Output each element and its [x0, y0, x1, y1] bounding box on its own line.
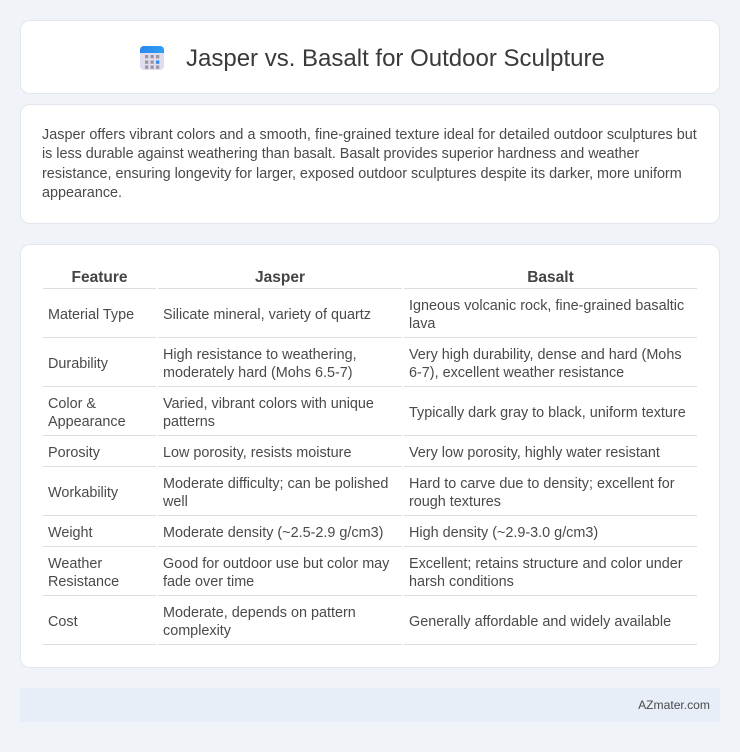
comparison table: Moderate density (~2.5-2.9 g/cm3)	[163, 525, 383, 541]
row: cost	[43, 605, 697, 645]
comparison table: Material Type	[48, 307, 134, 323]
comparison table: Hard to carve due to density; excellent for	[409, 476, 675, 492]
comparison table: Moderate difficulty; can be polished	[163, 476, 388, 492]
row: weight	[43, 525, 697, 547]
comparison table: Cost	[48, 614, 78, 630]
summary text: resistance, ensuring longevity for larger, exposed outdoor sculptures despite its darker, more uniform	[42, 166, 682, 182]
comparison table: Very low porosity, highly water resistant	[409, 445, 660, 461]
summary text: is less durable against weathering than basalt. Basalt provides superior hardness and weather	[42, 146, 639, 162]
footer credit: AZmater.com	[638, 698, 710, 712]
comparison table: Porosity	[48, 445, 100, 461]
row: workability	[43, 476, 697, 516]
summary text: appearance.	[42, 185, 122, 201]
comparison table: Moderate, depends on pattern	[163, 605, 356, 621]
comparison table: Low porosity, resists moisture	[163, 445, 351, 461]
comparison table: harsh conditions	[409, 574, 514, 590]
comparison table: Weight	[48, 525, 93, 541]
comparison table: Workability	[48, 485, 118, 501]
comparison table: Feature	[72, 269, 128, 286]
comparison table: 6-7), excellent weather resistance	[409, 365, 624, 381]
comparison table: Resistance	[48, 574, 119, 590]
comparison table: Basalt	[527, 269, 574, 286]
title: Jasper vs. Basalt for Outdoor Sculpture	[186, 45, 605, 72]
summary text: Jasper offers vibrant colors and a smooth, fine-grained texture ideal for detailed outdoor sculptures but	[42, 127, 697, 143]
comparison table: High density (~2.9-3.0 g/cm3)	[409, 525, 598, 541]
comparison table: High resistance to weathering,	[163, 347, 357, 363]
comparison table: Generally affordable and widely available	[409, 614, 671, 630]
row: color and appearance	[43, 396, 697, 436]
comparison table: fade over time	[163, 574, 254, 590]
comparison table: Very high durability, dense and hard (Mohs	[409, 347, 682, 363]
comparison table: complexity	[163, 623, 231, 639]
footer bar	[20, 688, 720, 722]
comparison table: well	[163, 494, 188, 510]
comparison table: lava	[409, 316, 435, 332]
comparison table: rough textures	[409, 494, 501, 510]
comparison table: Excellent; retains structure and color under	[409, 556, 683, 572]
comparison table: Color &	[48, 396, 96, 412]
comparison table: Jasper	[255, 269, 305, 286]
comparison table: moderately hard (Mohs 6.5-7)	[163, 365, 353, 381]
comparison table: Igneous volcanic rock, fine-grained basaltic	[409, 298, 684, 314]
comparison table: Good for outdoor use but color may	[163, 556, 389, 572]
comparison table: Typically dark gray to black, uniform texture	[409, 405, 686, 421]
row: material type	[43, 298, 697, 338]
summary panel	[20, 104, 720, 224]
comparison table: Silicate mineral, variety of quartz	[163, 307, 371, 323]
icon: calendar	[140, 46, 164, 70]
comparison table panel	[20, 244, 720, 668]
summary text	[42, 127, 697, 201]
row: durability	[43, 347, 697, 387]
comparison table: Appearance	[48, 414, 126, 430]
row: weather resistance	[43, 556, 697, 596]
comparison table	[43, 269, 697, 645]
header panel	[20, 20, 720, 94]
table header	[43, 269, 697, 289]
comparison table: Weather	[48, 556, 102, 572]
comparison table: Varied, vibrant colors with unique	[163, 396, 374, 412]
row: porosity	[43, 445, 697, 467]
comparison table: Durability	[48, 356, 108, 372]
comparison table: patterns	[163, 414, 215, 430]
